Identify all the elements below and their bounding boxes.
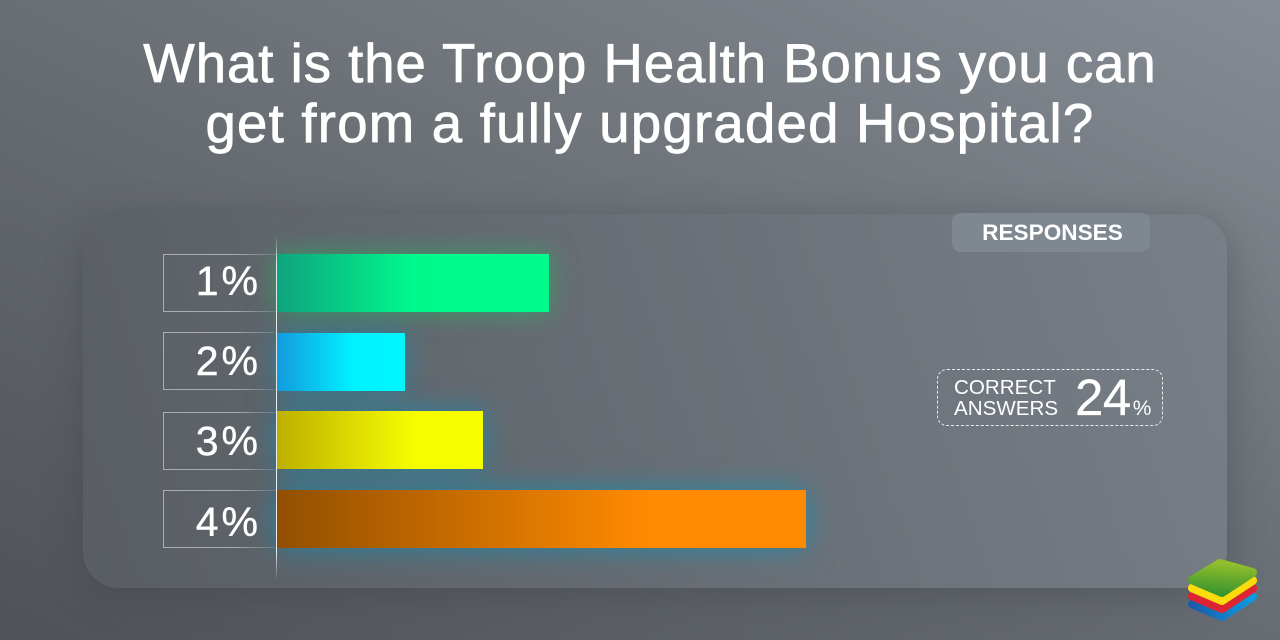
callout: correct answers — [937, 369, 1163, 426]
badge: responses — [952, 213, 1150, 252]
callout label — [954, 376, 1058, 420]
title: get from a fully upgraded Hospital? — [206, 93, 1094, 154]
callout label: CORRECT — [954, 376, 1056, 399]
panel: responses — [83, 214, 1227, 588]
label: 1% — [163, 254, 277, 312]
bar: 1% option — [277, 254, 549, 312]
label: 4%: 4% — [196, 499, 258, 545]
callout label: ANSWERS — [954, 397, 1058, 420]
title: What is the Troop Health Bonus you can — [143, 33, 1157, 94]
label: 3%: 3% — [196, 418, 258, 464]
label: 1%: 1% — [196, 258, 258, 304]
callout value: 24% — [1075, 369, 1151, 426]
axis line — [276, 236, 277, 580]
bar: 3% option — [277, 411, 483, 469]
icon: layered logo — [1188, 559, 1257, 621]
bar: 4% option — [277, 490, 806, 548]
label: 2%: 2% — [196, 338, 258, 384]
title — [143, 33, 1157, 154]
label: 4% — [163, 490, 277, 548]
label: 3% — [163, 412, 277, 470]
label: 2% — [163, 332, 277, 390]
bar: 2% option — [277, 333, 405, 391]
badge: responses: RESPONSES — [982, 220, 1123, 245]
